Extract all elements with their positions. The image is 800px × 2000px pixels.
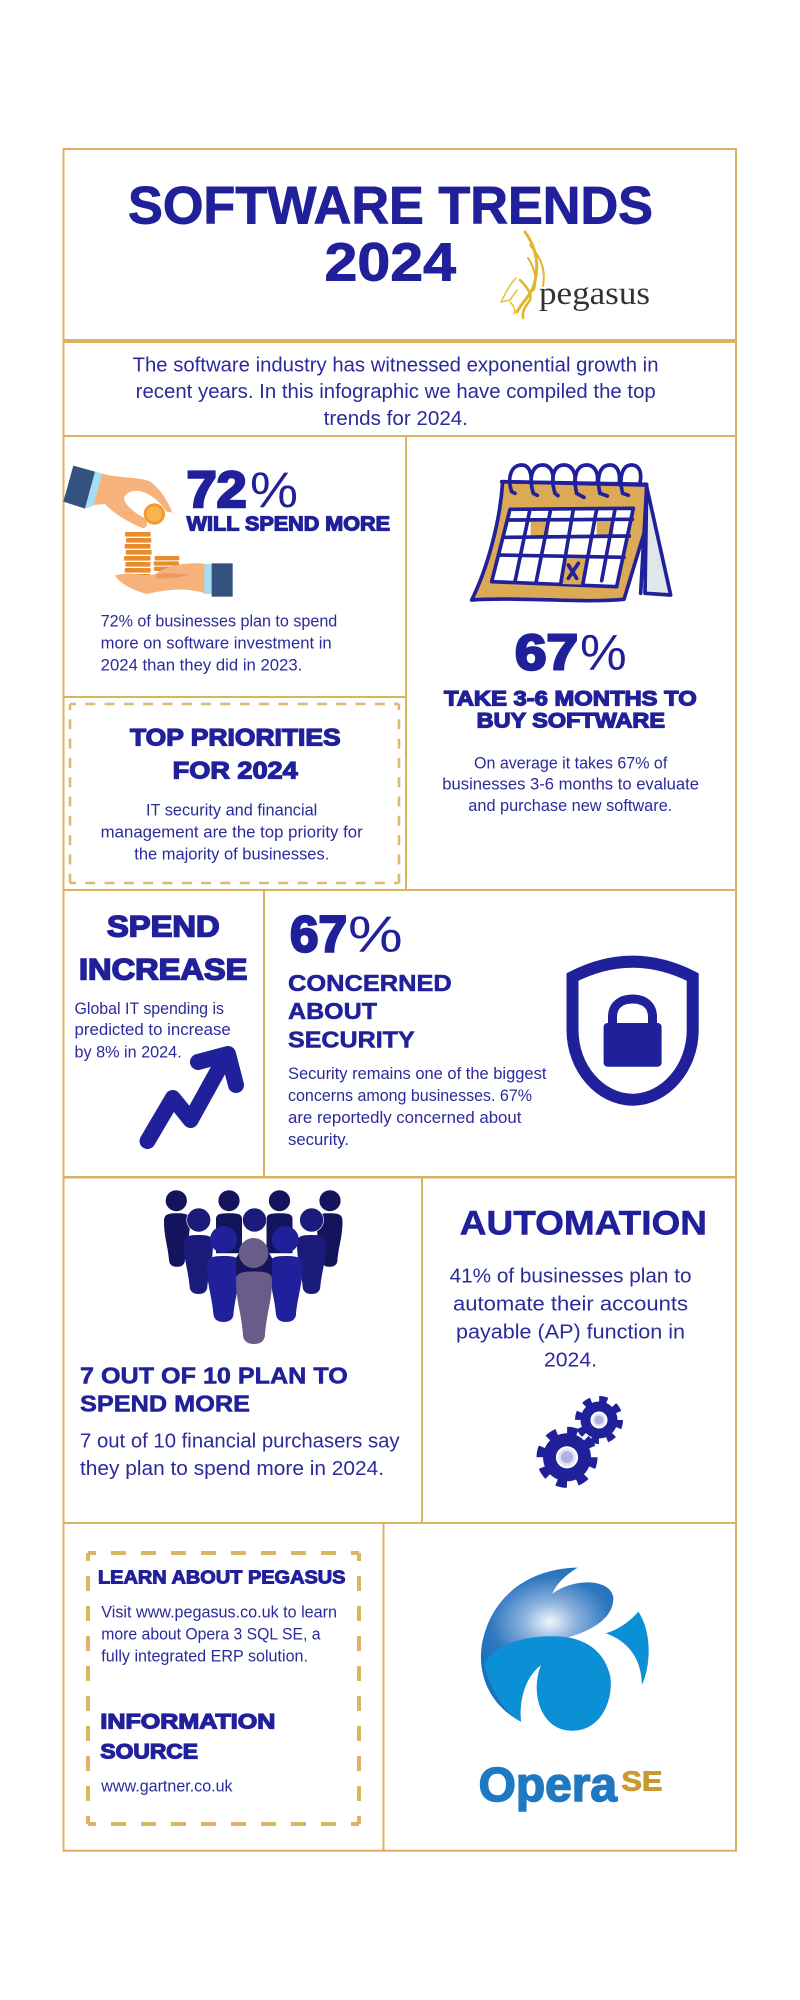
- icon: gears: [540, 1400, 620, 1484]
- logo: opera wordmark: SE: [621, 1766, 662, 1797]
- body text: 2024.: [544, 1349, 597, 1372]
- panel: introduction: [64, 342, 736, 436]
- stat: 72%: 72: [187, 461, 247, 518]
- body text: more on software investment in: [101, 634, 332, 652]
- intro text: recent years. In this infographic we have compiled the top: [136, 381, 656, 403]
- dashed frame: [88, 1553, 359, 1824]
- dashed frame: [70, 704, 399, 883]
- body text: payable (AP) function in: [456, 1321, 685, 1344]
- body text: 72% of businesses plan to spend: [101, 613, 337, 631]
- body text: fully integrated ERP solution.: [101, 1647, 308, 1665]
- heading: concerned about security: [288, 970, 452, 1052]
- body text: concerns among businesses. 67%: [288, 1087, 532, 1105]
- panel: automation: [422, 1178, 736, 1523]
- heading: spend increase: [79, 911, 247, 986]
- body text: and purchase new software.: [468, 797, 672, 815]
- heading: top priorities: [130, 725, 341, 784]
- body text: management are the top priority for: [101, 824, 363, 842]
- body text: [74, 1000, 231, 1061]
- heading: take 3-6 months: [444, 688, 697, 733]
- intro text: The software industry has witnessed exponential growth in: [133, 355, 659, 377]
- body text: [101, 1603, 337, 1665]
- title: [128, 176, 653, 293]
- body text: 7 out of 10 financial purchasers say: [80, 1431, 400, 1453]
- panel: 72% will spend more: [63, 436, 406, 697]
- heading: concerned about security: SECURITY: [288, 1026, 415, 1052]
- heading: 7 out of 10: 7 OUT OF 10 PLAN TO: [80, 1362, 348, 1388]
- icon: calendar: [472, 465, 671, 601]
- body text: On average it takes 67% of: [474, 754, 668, 772]
- panel: 7 out of 10: [64, 1178, 422, 1523]
- heading: spend increase: SPEND: [107, 911, 220, 944]
- heading: will spend more: WILL SPEND MORE: [187, 513, 390, 536]
- body text: businesses 3-6 months to evaluate: [442, 775, 699, 793]
- heading: take 3-6 months: BUY SOFTWARE: [477, 710, 665, 733]
- title: 2024: [324, 233, 456, 293]
- stat: 67%: 67: [290, 906, 347, 963]
- title: SOFTWARE TRENDS: [128, 176, 653, 235]
- body text: 41% of businesses plan to: [450, 1265, 692, 1288]
- body text: [442, 754, 699, 815]
- body text: by 8% in 2024.: [74, 1043, 182, 1061]
- stat: 67%: [290, 906, 403, 963]
- heading: information source: [100, 1710, 275, 1763]
- stat: 67%: [515, 624, 627, 680]
- logo: pegasus: pegasus: [539, 276, 650, 312]
- logo: pegasus: [501, 232, 650, 318]
- logo: opera sphere: [481, 1568, 649, 1731]
- body text: Global IT spending is: [74, 1000, 224, 1018]
- stat: 72%: [187, 461, 298, 518]
- heading: automation: AUTOMATION: [460, 1204, 707, 1242]
- heading: spend increase: INCREASE: [79, 953, 247, 986]
- panel: 67% take 3-6 months: [406, 436, 736, 890]
- panel: header: [64, 149, 736, 340]
- body text: [80, 1431, 400, 1480]
- panel: top priorities: [64, 697, 406, 890]
- heading: information source: INFORMATION: [100, 1710, 275, 1734]
- body text: [101, 802, 363, 863]
- body text: predicted to increase: [74, 1021, 231, 1039]
- body text: 2024 than they did in 2023.: [101, 657, 302, 675]
- body text: automate their accounts: [453, 1293, 688, 1316]
- icon: hands and coins: [63, 466, 233, 597]
- logo: opera wordmark: Opera: [479, 1759, 617, 1812]
- body text: [288, 1065, 547, 1149]
- heading: top priorities: TOP PRIORITIES: [130, 725, 341, 752]
- heading: top priorities: FOR 2024: [173, 757, 298, 784]
- icon: group of people: [164, 1190, 342, 1344]
- intro text: [133, 355, 659, 430]
- stat: 72%: %: [250, 462, 298, 518]
- body text: they plan to spend more in 2024.: [80, 1458, 384, 1480]
- heading: information source: SOURCE: [100, 1739, 198, 1763]
- body text: security.: [288, 1131, 349, 1149]
- heading: 7 out of 10: [80, 1362, 348, 1416]
- source link: www.gartner.co.uk: [100, 1778, 233, 1796]
- intro text: trends for 2024.: [324, 408, 468, 430]
- heading: learn about pegasus: LEARN ABOUT PEGASUS: [98, 1567, 346, 1587]
- heading: concerned about security: CONCERNED: [288, 970, 452, 996]
- panel: opera logo: [384, 1523, 736, 1851]
- body text: [101, 613, 337, 675]
- heading: concerned about security: ABOUT: [288, 998, 378, 1024]
- heading: take 3-6 months: TAKE 3-6 MONTHS TO: [444, 688, 697, 711]
- body text: are reportedly concerned about: [288, 1109, 522, 1127]
- body text: [450, 1265, 692, 1372]
- body text: IT security and financial: [146, 802, 317, 820]
- stat: 67%: %: [348, 906, 403, 963]
- body text: Security remains one of the biggest: [288, 1065, 547, 1083]
- body text: Visit www.pegasus.co.uk to learn: [101, 1603, 337, 1621]
- heading: 7 out of 10: SPEND MORE: [80, 1390, 250, 1416]
- panel: learn about pegasus: [64, 1523, 384, 1851]
- panel: concerned about security: [264, 890, 736, 1177]
- stat: 67%: 67: [515, 624, 578, 680]
- body text: the majority of businesses.: [134, 845, 329, 863]
- panel: spend increase: [64, 890, 264, 1177]
- icon: rising arrow: [148, 1054, 236, 1141]
- icon: shield with padlock: [572, 962, 693, 1100]
- body text: more about Opera 3 SQL SE, a: [101, 1625, 321, 1643]
- stat: 67%: %: [580, 624, 627, 680]
